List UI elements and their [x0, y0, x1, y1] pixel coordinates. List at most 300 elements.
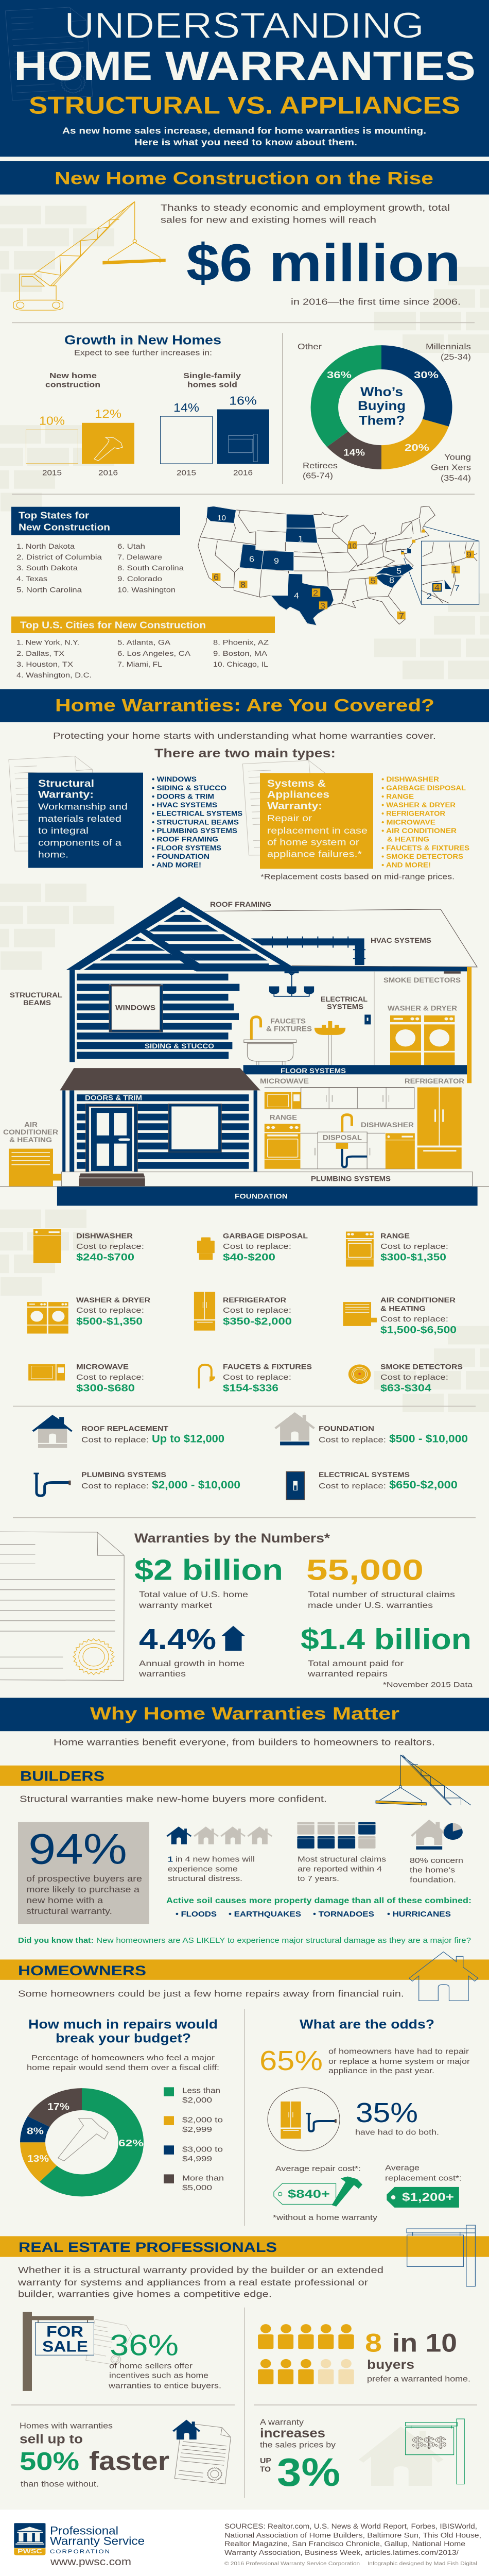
- active soil list: [166, 1896, 471, 1919]
- intro text: Here is what you need to know about them.: [134, 137, 357, 147]
- budget heading and text: [27, 2017, 219, 2072]
- panel: top states list: 1. North Dakota: [16, 543, 75, 551]
- panel: top cities list: 6. Los Angeles, CA: [117, 650, 190, 658]
- lower siding: [62, 1090, 257, 1172]
- stat: 36 percent: [108, 2329, 221, 2390]
- what are the odds: appliance in the past year.: [328, 2067, 434, 2075]
- list: structural coverage: • PLUMBING SYSTEMS: [152, 827, 237, 835]
- panel: growth in new homes: Growth in New Homes: [64, 333, 221, 347]
- icon: hammer outline: [58, 2119, 108, 2161]
- panel: top states list: Top States for: [19, 511, 89, 521]
- panel: top cities list: 1. New York, N.Y.: [16, 639, 79, 647]
- list: appliance coverage: • AIR CONDITIONER: [381, 827, 457, 835]
- for sale sign: [23, 2312, 94, 2391]
- donut chart: who's buying them: Millennials: [426, 342, 471, 351]
- callout: 94 percent: of prospective buyers are: [26, 1874, 142, 1884]
- icon: repair price tag and hammer: [274, 2176, 362, 2207]
- house labels: FLOOR SYSTEMS: [281, 1067, 346, 1075]
- map of the United States: 1: [298, 534, 303, 544]
- appliance costs, row 2: $1,500-$6,500: [380, 1325, 457, 1335]
- list: appliance coverage: • WASHER & DRYER: [381, 802, 456, 809]
- intro paragraph: warranty for systems and appliances from a real estate professional or: [18, 2277, 368, 2287]
- panel: builders: Structural warranties make new-home buyers more confident.: [20, 1794, 327, 1804]
- appliance costs, row 1: DISHWASHER: [76, 1232, 133, 1240]
- callout: 94 percent: 94%: [28, 1825, 127, 1873]
- appliance costs, row 3: Cost to replace:: [223, 1374, 291, 1382]
- text: structural claims: are reported within 4: [298, 1866, 382, 1873]
- active soil list: Active soil causes more property damage than all of these combined:: [166, 1896, 471, 1905]
- list: structural coverage: • WINDOWS: [152, 776, 197, 784]
- legend: $4,999: [182, 2155, 212, 2163]
- list: appliance coverage: • FAUCETS & FIXTURES: [381, 844, 469, 852]
- intro text: two types: There are two main types:: [154, 747, 336, 760]
- house labels: ROOF FRAMING: [210, 901, 271, 909]
- panel: top cities list: 10. Chicago, IL: [213, 660, 268, 669]
- map of the United States: 3: [298, 549, 303, 558]
- icon: faint house and price sign: [359, 2419, 464, 2486]
- icon: people 8 in 10: [258, 2324, 354, 2384]
- appliance costs, row 3: $63-$304: [380, 1383, 432, 1394]
- panel: structural warranty: Structural: [38, 778, 94, 789]
- text: 1 in 4: [168, 1855, 255, 1883]
- illustration: warranty document: [0, 1532, 124, 1680]
- bar chart: new home construction: 10%: [39, 415, 65, 428]
- text: foundation concern: the home’s: [410, 1866, 455, 1874]
- sink: [315, 1021, 345, 1065]
- house labels: CONDITIONER: [3, 1129, 59, 1137]
- icon: house with pie: [411, 1820, 463, 1850]
- structural costs: $650-$2,000: [389, 1479, 458, 1491]
- house labels: ELECTRICAL: [321, 996, 368, 1003]
- appliance costs, row 3: [28, 1363, 463, 1394]
- section heading: why home warranties matter: [0, 1698, 489, 1731]
- stat: 8 in 10 buyers: in 10: [392, 2329, 457, 2358]
- panel: top states list: [11, 507, 184, 594]
- active soil list: • FLOODS: [176, 1910, 217, 1919]
- stat: 8 in 10 buyers: prefer a warranted home.: [367, 2374, 470, 2383]
- donut chart: who's buying them: Them?: [359, 413, 405, 428]
- icon: house outline: [409, 1952, 478, 2001]
- house labels: REFRIGERATOR: [405, 1078, 464, 1086]
- donut chart: who's buying them: Other: [298, 342, 322, 351]
- icon: smoke detector: [348, 1364, 371, 1384]
- stat: 50 percent faster: faster: [89, 2446, 169, 2476]
- icon: replacement price tag: [387, 2187, 459, 2208]
- text: 1 in 4: structural distress.: [168, 1875, 242, 1883]
- icon: plumbing: [33, 1473, 71, 1496]
- panel: top cities list: 2. Dallas, TX: [16, 650, 64, 658]
- map of the United States: 1: [453, 565, 458, 574]
- house labels: BEAMS: [23, 999, 51, 1007]
- icon: faucet: [199, 1365, 215, 1388]
- stat: up to 3 percent: TO: [260, 2466, 271, 2473]
- panel: systems and appliances warranty: Warranty:: [267, 801, 322, 811]
- stat: 50 percent faster: sell up to: [20, 2432, 83, 2446]
- header panel: [0, 0, 489, 157]
- intro text: two types: Protecting your home starts with understanding what home warranties cover.: [53, 731, 436, 741]
- list: appliance coverage: & HEATING: [387, 836, 429, 843]
- list: structural coverage: • FOUNDATION: [152, 853, 209, 861]
- section heading: new home construction: [0, 161, 489, 195]
- panel: systems and appliances warranty: replacement in case: [267, 825, 368, 836]
- list: appliance coverage: • MICROWAVE: [381, 819, 435, 826]
- kitchen upper cabinets and microwave: [265, 1087, 414, 1109]
- door: [86, 1104, 137, 1172]
- what are the odds: What are the odds?: [300, 2017, 434, 2031]
- average repair and replacement cost: *without a home warranty: [273, 2214, 377, 2222]
- panel: top states list: 4. Texas: [16, 575, 47, 583]
- appliance costs, row 3: FAUCETS & FIXTURES: [223, 1363, 312, 1371]
- house labels: PLUMBING SYSTEMS: [311, 1175, 391, 1183]
- average repair and replacement cost: Average: [385, 2164, 420, 2172]
- panel: top states list: 6. Utah: [117, 543, 145, 551]
- icon: faint house and price sign: $$$: [412, 2434, 446, 2451]
- appliance costs, row 2: & HEATING: [380, 1305, 426, 1313]
- stat: up to 3 percent: increases: [260, 2426, 325, 2441]
- panel: top cities list: 7. Miami, FL: [117, 660, 162, 669]
- icon: calendars: [297, 1822, 376, 1849]
- map of the United States: 7: [399, 612, 404, 621]
- text: structural claims: [298, 1855, 386, 1883]
- donut chart: repair budget: [20, 2088, 144, 2196]
- legend: $2,000: [182, 2096, 212, 2105]
- icon: microwave: [28, 1364, 65, 1381]
- what are the odds: 65%: [259, 2046, 323, 2076]
- title: UNDERSTANDING: [64, 5, 424, 46]
- list: appliance coverage: • REFRIGERATOR: [381, 810, 445, 818]
- appliance costs, row 2: REFRIGERATOR: [223, 1296, 286, 1304]
- icon: navy crane: [376, 1755, 471, 1806]
- map of the United States: 8: [389, 576, 394, 585]
- background bricks left and right: [0, 206, 489, 1412]
- donut chart: who's buying them: 14%: [343, 448, 365, 458]
- bar chart: new home construction: 12%: [95, 408, 121, 421]
- list: structural coverage: • SIDING & STUCCO: [152, 785, 226, 792]
- donut chart: who's buying them: 36%: [327, 370, 352, 381]
- panel: growth in new homes: Single-family: [183, 372, 241, 380]
- panel: structural warranty: [28, 773, 143, 868]
- sources: National Association of Home Builders, Baltimore Sun, This Old House,: [224, 2531, 481, 2539]
- panel: growth in new homes: New home: [49, 372, 97, 380]
- structural costs: FOUNDATION: [319, 1425, 374, 1433]
- donut chart: repair budget: 8%: [27, 2126, 44, 2137]
- stat: up to 3 percent: 3%: [277, 2450, 340, 2495]
- structural costs: ROOF REPLACEMENT: [81, 1425, 169, 1433]
- panel: top cities list: 5. Atlanta, GA: [117, 639, 170, 647]
- legend: $2,999: [182, 2126, 212, 2134]
- panel: top states list: New Construction: [19, 522, 110, 533]
- structural costs: $2,000 - $10,000: [152, 1479, 240, 1491]
- panel: top cities list: 3. Houston, TX: [16, 660, 73, 669]
- donut chart: repair budget: 13%: [27, 2154, 49, 2164]
- house labels: FOUNDATION: [235, 1193, 288, 1200]
- list: appliance coverage: [381, 776, 469, 869]
- sources: Realtor Magazine, San Francisco Chronicle, Gallup, National Home: [224, 2540, 465, 2548]
- list: structural coverage: • HVAC SYSTEMS: [152, 802, 217, 809]
- intro paragraph and big number: Thanks to steady economic and employment growth, total: [161, 202, 450, 213]
- heading band: HOMEOWNERS: [18, 1963, 146, 1979]
- panel: warranties by the numbers: $2 billion: [134, 1553, 283, 1586]
- icon: roof replacement: [32, 1415, 73, 1448]
- icon: foundation: [274, 1412, 315, 1445]
- appliance costs, row 3: SMOKE DETECTORS: [380, 1363, 463, 1371]
- intro paragraph and big number: in 2016—the first time since 2006.: [291, 296, 461, 307]
- bar chart: new home construction: [26, 408, 134, 477]
- panel: systems and appliances warranty: Systems &: [267, 778, 326, 789]
- panel: systems and appliances warranty: of home system or: [267, 837, 359, 847]
- callout: 94 percent: more likely to purchase a: [26, 1885, 139, 1894]
- donut chart: who's buying them: Young: [444, 453, 471, 462]
- panel: builders: [0, 1755, 489, 1945]
- budget heading and text: How much in repairs would: [28, 2017, 218, 2031]
- stat: 36 percent: 36%: [110, 2329, 179, 2362]
- icon: crane: [13, 201, 165, 310]
- house labels: [3, 901, 464, 1200]
- what are the odds: have had to do both.: [355, 2128, 439, 2137]
- callout: 94 percent: structural warranty.: [26, 1906, 112, 1916]
- text: foundation concern: 80% concern: [410, 1857, 463, 1865]
- appliance costs, row 1: RANGE: [380, 1232, 410, 1240]
- what are the odds: 35%: [356, 2097, 418, 2128]
- panel: top cities list: 8. Phoenix, AZ: [213, 639, 269, 647]
- legend: [164, 2087, 224, 2192]
- faucet and toilet: [244, 1017, 296, 1065]
- text: structural claims: Most structural claims: [298, 1855, 386, 1863]
- illustration: document behind sign: [86, 2319, 132, 2365]
- appliance costs, row 3: MICROWAVE: [76, 1363, 129, 1371]
- legend: More than: [182, 2175, 224, 2182]
- section heading: are you covered: [0, 689, 489, 722]
- budget heading and text: Percentage of homeowners who feel a major: [31, 2054, 215, 2062]
- for sale sign: SALE: [42, 2338, 88, 2355]
- list: structural coverage: • FLOOR SYSTEMS: [152, 844, 221, 852]
- logo: PWSC: Warranty Service: [50, 2535, 145, 2547]
- heading band: REAL ESTATE PROFESSIONALS: [19, 2240, 277, 2256]
- donut chart: who's buying them: [298, 342, 471, 483]
- panel: top states list: 10. Washington: [117, 586, 176, 594]
- list: structural coverage: • ROOF FRAMING: [152, 836, 218, 843]
- appliance costs, row 1: Cost to replace:: [380, 1243, 448, 1251]
- icon: up arrow: [221, 1626, 245, 1651]
- list: appliance coverage: • DISHWASHER: [381, 776, 439, 784]
- panel: structural warranty: Workmanship and: [38, 802, 128, 811]
- panel: top states list: 8. South Carolina: [117, 564, 184, 572]
- panel: top cities list: [11, 617, 275, 680]
- section heading: new home construction: New Home Construction on the Rise: [55, 168, 433, 188]
- list: appliance coverage: • SMOKE DETECTORS: [381, 853, 463, 861]
- section heading: why home warranties matter: Why Home Warranties Matter: [90, 1704, 399, 1723]
- budget heading and text: home repair would send them over a fiscal cliff:: [27, 2064, 219, 2072]
- panel: systems and appliances warranty: appliance failures.*: [267, 849, 362, 859]
- appliance costs, row 3: Cost to replace:: [76, 1374, 144, 1382]
- panel: warranties by the numbers: Warranties by the Numbers*: [134, 1531, 330, 1546]
- intro paragraph: [18, 2265, 383, 2299]
- heading band: [0, 1766, 489, 1786]
- map of the United States: [198, 506, 479, 625]
- house labels: FAUCETS: [270, 1018, 306, 1025]
- active soil list: • EARTHQUAKES: [229, 1910, 301, 1919]
- panel: warranties by the numbers: Total number of structural claims: [308, 1590, 455, 1599]
- panel: top states list: 5. North Carolina: [16, 586, 82, 594]
- average repair and replacement cost: replacement cost*:: [385, 2175, 462, 2182]
- legend: $3,000 to: [182, 2145, 223, 2154]
- house labels: & FIXTURES: [266, 1025, 312, 1033]
- washer and dryer: [390, 1015, 455, 1065]
- chandelier: [269, 971, 314, 997]
- panel: warranties by the numbers: *November 2015 Data: [383, 1681, 473, 1689]
- intro paragraph and big number: sales for new and existing homes will reach: [161, 215, 376, 225]
- text: foundation concern: [410, 1857, 463, 1884]
- appliance costs, row 2: AIR CONDITIONER: [380, 1296, 456, 1304]
- stat: 8 in 10 buyers: 8: [365, 2329, 382, 2358]
- panel: warranties by the numbers: Annual growth in home: [139, 1659, 244, 1668]
- donut chart: who's buying them: (25-34): [441, 352, 471, 362]
- lower window: [168, 1104, 221, 1152]
- icon: electrical switch: [286, 1471, 304, 1500]
- air conditioner: [9, 1149, 61, 1187]
- text: 1 in 4: experience some: [168, 1866, 238, 1873]
- structural costs: Cost to replace:: [81, 1482, 149, 1490]
- icon: houses 1 in 4: [166, 1826, 273, 1844]
- callout: 94 percent: [18, 1822, 149, 1924]
- budget heading and text: break your budget?: [56, 2031, 191, 2045]
- panel: structural warranty: Warranty:: [38, 789, 94, 800]
- structural costs: Up to $12,000: [152, 1433, 224, 1445]
- appliance costs, row 2: $500-$1,350: [76, 1316, 143, 1327]
- donut chart: repair budget: 17%: [47, 2102, 69, 2112]
- appliance costs, row 1: [33, 1229, 448, 1267]
- bar chart: new home construction: 2015: [42, 469, 62, 477]
- intro text: two types: [53, 731, 436, 760]
- icon: washer and dryer: [27, 1302, 68, 1333]
- map of the United States: 6: [214, 573, 219, 582]
- house labels: HVAC SYSTEMS: [371, 937, 431, 945]
- legend: Less than: [182, 2087, 220, 2095]
- intro text: As new home sales increase, demand for home warranties is mounting.: [62, 125, 426, 135]
- logo: PWSC: www.pwsc.com: [50, 2555, 131, 2568]
- text: foundation concern: foundation.: [410, 1876, 456, 1884]
- map of the United States: 4: [294, 591, 299, 600]
- sources: Warranty Association, Business Week, articles.latimes.com/2013/: [224, 2549, 459, 2557]
- intro paragraph and big number: $6 million: [186, 233, 461, 293]
- map of the United States: 10: [217, 514, 226, 522]
- panel: top cities list: Top U.S. Cities for New Construction: [20, 620, 206, 631]
- stat: 50 percent faster: 50%: [20, 2447, 79, 2476]
- sources: [224, 2522, 481, 2567]
- logo: PWSC: [14, 2523, 145, 2568]
- map of the United States: 8: [240, 581, 246, 589]
- list: appliance coverage: • AND MORE!: [381, 861, 431, 869]
- intro text: [62, 125, 426, 147]
- heading band: [0, 1959, 489, 1980]
- inset map: [422, 541, 479, 604]
- appliance costs, row 2: Cost to replace:: [223, 1307, 291, 1315]
- panel: warranties by the numbers: 4.4%: [139, 1623, 216, 1655]
- appliance costs, row 2: WASHER & DRYER: [76, 1296, 150, 1304]
- appliance costs, row 2: Cost to replace:: [76, 1307, 144, 1315]
- stat: 8 in 10 buyers: [365, 2329, 470, 2383]
- structural costs: Cost to replace:: [81, 1436, 149, 1444]
- panel: warranties by the numbers: $1.4 billion: [301, 1623, 471, 1655]
- active soil list: • TORNADOES: [313, 1910, 374, 1919]
- appliance costs, row 3: Cost to replace:: [380, 1374, 448, 1382]
- section heading: are you covered: Home Warranties: Are You Covered?: [55, 696, 434, 715]
- stat: up to 3 percent: UP: [260, 2457, 271, 2465]
- list: appliance coverage: • RANGE: [381, 793, 414, 801]
- donut chart: who's buying them: Gen Xers: [431, 463, 471, 472]
- average repair and replacement cost: $840+: [288, 2188, 330, 2200]
- house labels: SYSTEMS: [327, 1003, 363, 1011]
- panel: warranties by the numbers: made under U.S. warranties: [308, 1601, 433, 1610]
- panel: top cities list: 9. Boston, MA: [213, 650, 267, 658]
- kitchen sink cabinet and disposal: [300, 1115, 415, 1169]
- donut chart: who's buying them: Retirees: [303, 461, 338, 470]
- panel: systems and appliances warranty: [260, 773, 373, 869]
- map of the United States: 6: [249, 555, 254, 564]
- list: structural coverage: • AND MORE!: [152, 861, 201, 869]
- donut chart: who's buying them: 20%: [405, 443, 430, 453]
- stat: 50 percent faster: Homes with warranties: [20, 2421, 113, 2430]
- appliance costs, row 2: $350-$2,000: [223, 1316, 292, 1327]
- icon: blank sign outline: [407, 2225, 475, 2286]
- sources: © 2016 Professional Warranty Service Corporation: [224, 2561, 360, 2567]
- house labels: DISHWASHER: [361, 1122, 414, 1129]
- panel: top cities list: 4. Washington, D.C.: [16, 671, 92, 680]
- map of the United States: 2: [427, 591, 432, 601]
- stat: 50 percent faster: [20, 2421, 169, 2488]
- intro paragraph and big number: [161, 202, 461, 307]
- house labels: SMOKE DETECTORS: [383, 977, 461, 985]
- bar chart: single-family homes sold: [161, 395, 269, 477]
- list: appliance coverage: • GARBAGE DISPOSAL: [381, 785, 466, 792]
- active soil list: • HURRICANES: [387, 1910, 451, 1919]
- donut chart: who's buying them: Buying: [358, 399, 406, 413]
- panel: warranties by the numbers: 55,000: [306, 1553, 424, 1586]
- list: structural coverage: • ELECTRICAL SYSTEMS: [152, 810, 242, 818]
- stat: 36 percent: incentives such as home: [109, 2371, 208, 2380]
- house labels: SIDING & STUCCO: [145, 1043, 214, 1050]
- heading band: [0, 2236, 489, 2257]
- panel: top states list: 2. District of Columbia: [16, 553, 102, 562]
- icon: air conditioner: [343, 1302, 377, 1326]
- appliance costs, row 3: $300-$680: [76, 1383, 135, 1394]
- panel: warranties by the numbers: Total value of U.S. home: [139, 1590, 248, 1599]
- panel: growth in new homes: construction: [45, 381, 100, 389]
- map of the United States: 9: [466, 550, 471, 560]
- document watermark with seal: [5, 7, 93, 100]
- structural costs: [32, 1412, 468, 1500]
- callout: 94 percent: new home with a: [26, 1895, 103, 1905]
- structural costs: PLUMBING SYSTEMS: [81, 1471, 166, 1479]
- map of the United States: 5: [396, 566, 401, 575]
- panel: systems and appliances warranty: Repair or: [267, 813, 312, 823]
- range: [265, 1124, 300, 1169]
- did you know: New homeowners are AS LIKELY to experience major structural damage as they are a major fire?: [96, 1937, 471, 1945]
- stat: 36 percent: warranties to entice buyers.: [108, 2382, 221, 2390]
- bar chart: single-family homes sold: 16%: [229, 395, 257, 408]
- icon: garbage disposal: [197, 1238, 215, 1260]
- what are the odds: or replace a home system or major: [328, 2058, 470, 2066]
- panel: warranties by the numbers: [134, 1531, 473, 1689]
- map of the United States: 5: [371, 577, 376, 585]
- HVAC duct: [251, 937, 365, 965]
- icon: fridge and pipe in circle: [268, 2088, 340, 2151]
- panel: homeowners: Some homeowners could be just a few home repairs away from financial ruin.: [18, 1988, 404, 1998]
- refrigerator: [417, 1087, 462, 1169]
- appliance costs, row 1: Cost to replace:: [223, 1243, 291, 1251]
- average repair and replacement cost: $1,200+: [402, 2191, 454, 2204]
- panel: systems and appliances warranty: Appliances: [267, 789, 329, 800]
